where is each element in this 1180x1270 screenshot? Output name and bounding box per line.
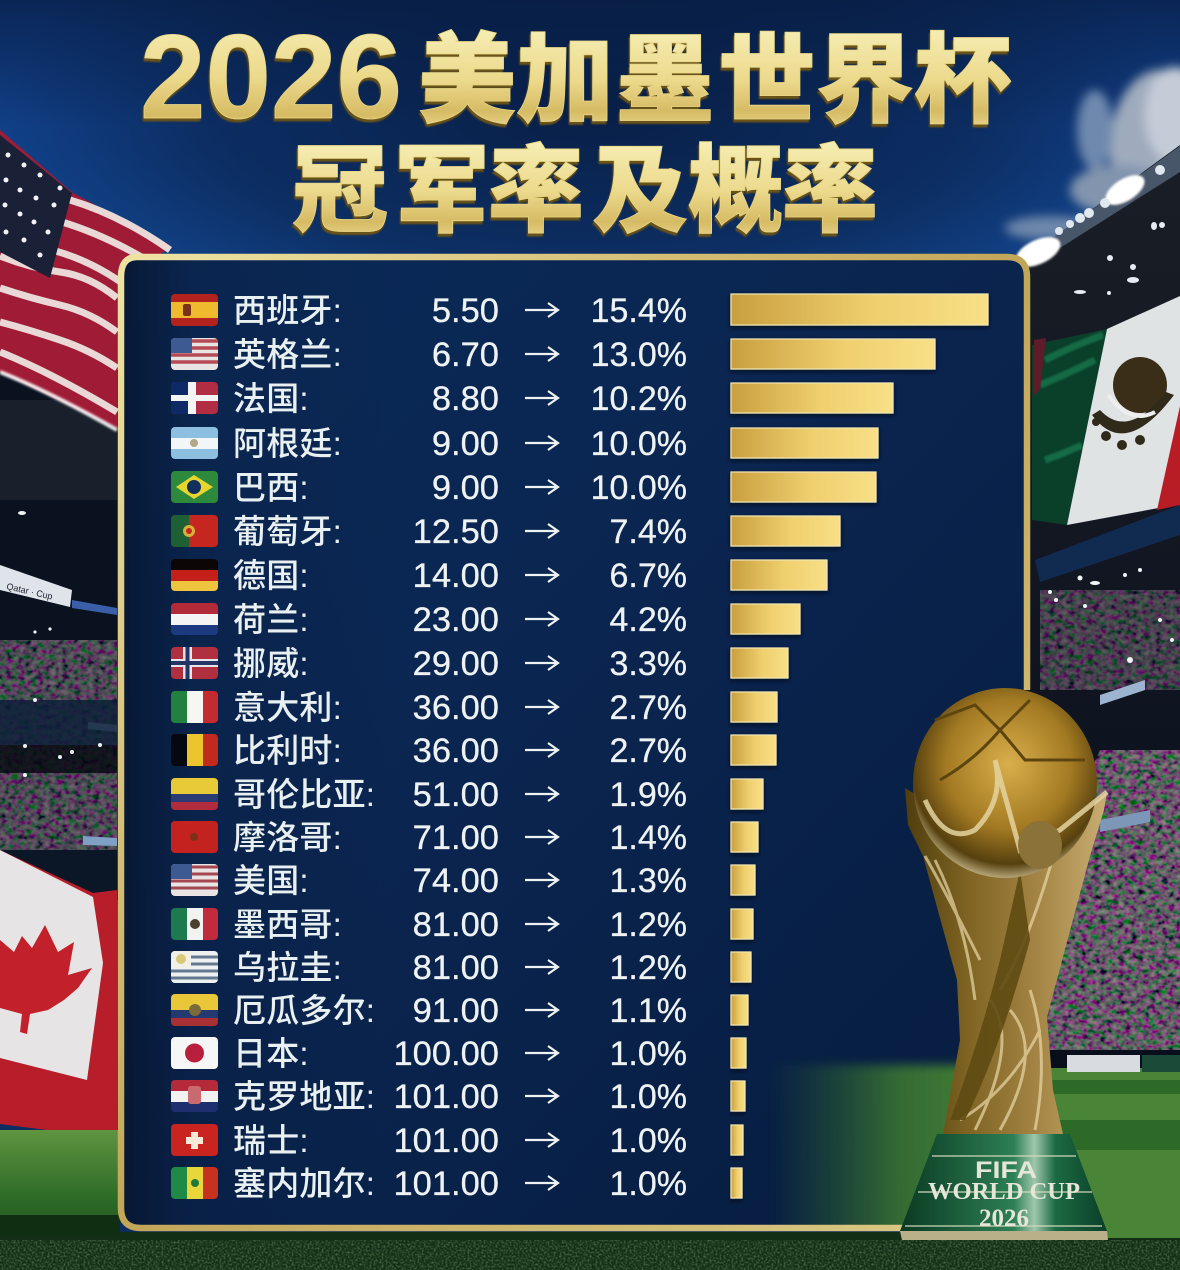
- row: Netherlands: 23.00: [413, 601, 499, 639]
- row: Portugal: 葡萄牙:: [233, 513, 342, 550]
- row: France: 8.80: [432, 380, 499, 418]
- row: Argentina: 10.0%: [591, 425, 687, 463]
- row: Italy: 意大利:: [233, 689, 342, 726]
- row: Japan: 日本:: [233, 1035, 309, 1072]
- row: Belgium: 2.7%: [610, 732, 687, 770]
- row: England: 英格兰:: [233, 336, 342, 373]
- row: USA: [171, 862, 755, 900]
- row: France: 法国:: [233, 380, 309, 417]
- row: Morocco: 1.4%: [610, 819, 687, 857]
- background: right stadium: [1011, 145, 1180, 1080]
- row: Belgium: 比利时:: [233, 732, 342, 769]
- row: Argentina: 9.00: [432, 425, 499, 463]
- row: Norway: 29.00: [413, 645, 499, 683]
- row: Netherlands: [171, 601, 800, 639]
- icon: World Cup trophy: [900, 688, 1108, 1240]
- title: 冠军率及概率: [292, 138, 878, 245]
- row: Spain: 15.4%: [591, 292, 687, 330]
- row: USA: 74.00: [413, 862, 499, 900]
- row: Italy: 2.7%: [610, 689, 687, 727]
- row: Netherlands: 4.2%: [610, 601, 687, 639]
- row: Ecuador: 厄瓜多尔:: [233, 992, 375, 1029]
- row: Brazil: [171, 469, 876, 507]
- row: Switzerland: 瑞士:: [233, 1122, 309, 1159]
- row: France: [171, 380, 893, 418]
- row: Uruguay: 乌拉圭:: [233, 949, 342, 986]
- row: England: [171, 336, 935, 374]
- row: Croatia: 克罗地亚:: [233, 1078, 375, 1115]
- row: Senegal: 101.00: [393, 1165, 499, 1203]
- row: Mexico: 墨西哥:: [233, 906, 342, 943]
- row: Croatia: 1.0%: [610, 1078, 687, 1116]
- row: Morocco: [171, 819, 758, 857]
- row: France: 10.2%: [591, 380, 687, 418]
- row: Germany: 14.00: [413, 557, 499, 595]
- title: 美加墨世界杯: [418, 25, 1012, 135]
- row: Belgium: 36.00: [413, 732, 499, 770]
- icon: World Cup trophy: WORLD CUP: [928, 1179, 1080, 1205]
- row: USA: 1.3%: [610, 862, 687, 900]
- row: Morocco: 摩洛哥:: [233, 819, 342, 856]
- row: Uruguay: [171, 949, 751, 987]
- row: Norway: [171, 645, 788, 683]
- row: Brazil: 10.0%: [591, 469, 687, 507]
- row: Brazil: 9.00: [432, 469, 499, 507]
- row: Spain: 西班牙:: [233, 292, 342, 329]
- row: Norway: 挪威:: [233, 645, 309, 682]
- background: clouds top right: [1005, 67, 1180, 240]
- row: Colombia: [171, 776, 763, 814]
- row: Croatia: [171, 1078, 745, 1116]
- flag: Canada: [0, 850, 117, 1139]
- row: Belgium: [171, 732, 776, 770]
- row: Colombia: 1.9%: [610, 776, 687, 814]
- row: Italy: [171, 689, 777, 727]
- title: 2026: [140, 10, 402, 144]
- row: Brazil: 巴西:: [233, 469, 309, 506]
- row: Netherlands: 荷兰:: [233, 601, 309, 638]
- row: Uruguay: 81.00: [413, 949, 499, 987]
- row: Italy: 36.00: [413, 689, 499, 727]
- row: Colombia: 51.00: [413, 776, 499, 814]
- row: Spain: 5.50: [432, 292, 499, 330]
- background: left stadium: Qatar · Cup: [6, 581, 54, 602]
- row: Senegal: 1.0%: [610, 1165, 687, 1203]
- row: Switzerland: 101.00: [393, 1122, 499, 1160]
- row: Senegal: 塞内加尔:: [233, 1165, 375, 1202]
- title: [140, 10, 1012, 245]
- row: Portugal: 12.50: [413, 513, 499, 551]
- row: Japan: 100.00: [393, 1035, 499, 1073]
- row: Spain: [171, 292, 988, 330]
- background: left stadium: [0, 370, 120, 900]
- row: Japan: [171, 1035, 746, 1073]
- row: Ecuador: 1.1%: [610, 992, 687, 1030]
- icon: World Cup trophy: FIFA: [975, 1157, 1037, 1184]
- row: Croatia: 101.00: [393, 1078, 499, 1116]
- flag: Mexico: [1032, 296, 1180, 525]
- flag: USA: [0, 130, 170, 430]
- row: Ecuador: 91.00: [413, 992, 499, 1030]
- panel: odds table: [120, 256, 1027, 1240]
- row: Argentina: 阿根廷:: [233, 425, 342, 462]
- pitch: [0, 1055, 1180, 1270]
- row: Mexico: 1.2%: [610, 906, 687, 944]
- row: Colombia: 哥伦比亚:: [233, 776, 375, 813]
- icon: World Cup trophy: 2026: [979, 1205, 1029, 1232]
- row: Mexico: 81.00: [413, 906, 499, 944]
- row: Germany: [171, 557, 827, 595]
- row: Argentina: [171, 425, 878, 463]
- row: Senegal: [171, 1165, 742, 1203]
- row: Switzerland: 1.0%: [610, 1122, 687, 1160]
- row: England: 6.70: [432, 336, 499, 374]
- row: USA: 美国:: [233, 862, 309, 899]
- row: Portugal: 7.4%: [610, 513, 687, 551]
- row: Uruguay: 1.2%: [610, 949, 687, 987]
- row: Germany: 德国:: [233, 557, 309, 594]
- row: Switzerland: [171, 1122, 743, 1160]
- row: Germany: 6.7%: [610, 557, 687, 595]
- row: Mexico: [171, 906, 753, 944]
- row: Portugal: [171, 513, 840, 551]
- row: Ecuador: [171, 992, 748, 1030]
- row: Norway: 3.3%: [610, 645, 687, 683]
- row: Japan: 1.0%: [610, 1035, 687, 1073]
- row: Morocco: 71.00: [413, 819, 499, 857]
- row: England: 13.0%: [591, 336, 687, 374]
